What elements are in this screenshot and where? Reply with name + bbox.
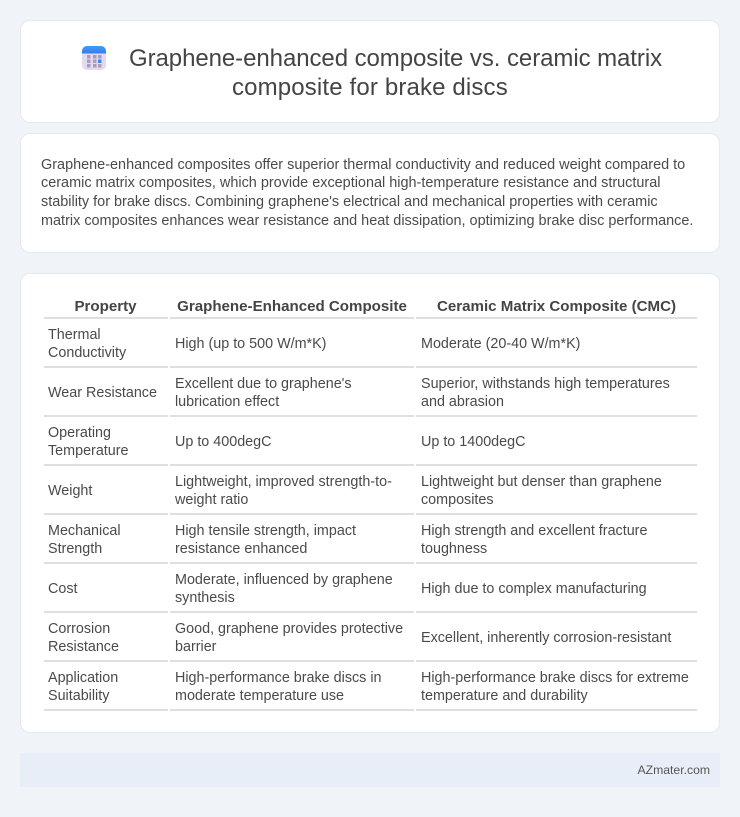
- title: composite for brake discs: [232, 74, 508, 101]
- footer bar: [20, 753, 720, 787]
- row: thermal conductivity: Moderate (20-40 W/m*K): [421, 336, 580, 352]
- title: Graphene-enhanced composite vs. ceramic matrix: [129, 45, 662, 72]
- row: application suitability: Suitability: [48, 688, 109, 704]
- row: corrosion resistance: Resistance: [48, 639, 119, 655]
- panel: summary card: [20, 133, 720, 253]
- row: weight: Lightweight but denser than graphene: [421, 474, 662, 490]
- row: thermal conductivity: [44, 327, 697, 368]
- row: thermal conductivity: Thermal: [48, 327, 101, 343]
- row: mechanical strength: toughness: [421, 541, 487, 557]
- row: application suitability: moderate temperature use: [175, 688, 344, 704]
- table header: Ceramic Matrix Composite (CMC): [437, 298, 676, 315]
- summary text: ceramic matrix composites, which provide exceptional high-temperature resistance and structural: [41, 175, 660, 191]
- row: thermal conductivity: High (up to 500 W/m*K): [175, 336, 326, 352]
- row: cost: synthesis: [175, 590, 235, 606]
- row: mechanical strength: High strength and excellent fracture: [421, 523, 647, 539]
- row: wear resistance: lubrication effect: [175, 394, 279, 410]
- row: operating temperature: Temperature: [48, 443, 129, 459]
- row: operating temperature: Up to 1400degC: [421, 434, 525, 450]
- row: application suitability: High-performance brake discs for extreme: [421, 670, 689, 686]
- table header: Property: [74, 298, 137, 315]
- row: application suitability: temperature and durability: [421, 688, 588, 704]
- row: wear resistance: [44, 376, 697, 417]
- summary text: Graphene-enhanced composites offer superior thermal conductivity and reduced weight compared to: [41, 157, 685, 173]
- row: weight: composites: [421, 492, 494, 508]
- row: wear resistance: Wear Resistance: [48, 385, 157, 401]
- summary text: stability for brake discs. Combining graphene's electrical and mechanical properties with ceramic: [41, 194, 658, 210]
- summary text: [41, 157, 693, 229]
- row: cost: [44, 572, 697, 613]
- row: application suitability: Application: [48, 670, 118, 686]
- row: mechanical strength: [44, 523, 697, 564]
- row: wear resistance: and abrasion: [421, 394, 504, 410]
- row: mechanical strength: Strength: [48, 541, 102, 557]
- row: weight: Lightweight, improved strength-to-: [175, 474, 392, 490]
- panel: comparison table card: [20, 273, 720, 733]
- row: application suitability: High-performance brake discs in: [175, 670, 381, 686]
- row: cost: High due to complex manufacturing: [421, 581, 647, 597]
- summary text: matrix composites enhances wear resistance and heat dissipation, optimizing brake disc performance.: [41, 213, 693, 229]
- table header: [44, 298, 697, 319]
- row: wear resistance: Excellent due to graphene's: [175, 376, 352, 392]
- row: thermal conductivity: Conductivity: [48, 345, 126, 361]
- row: operating temperature: Operating: [48, 425, 111, 441]
- row: corrosion resistance: Good, graphene provides protective: [175, 621, 403, 637]
- row: wear resistance: Superior, withstands high temperatures: [421, 376, 670, 392]
- row: mechanical strength: High tensile strength, impact: [175, 523, 356, 539]
- row: cost: Moderate, influenced by graphene: [175, 572, 393, 588]
- row: corrosion resistance: Corrosion: [48, 621, 110, 637]
- panel: title card: [20, 20, 720, 123]
- row: operating temperature: [44, 425, 697, 466]
- table header: Graphene-Enhanced Composite: [177, 298, 407, 315]
- row: corrosion resistance: barrier: [175, 639, 216, 655]
- row: weight: [44, 474, 697, 515]
- row: weight: weight ratio: [175, 492, 248, 508]
- row: application suitability: [44, 670, 697, 711]
- title: [129, 45, 662, 101]
- row: operating temperature: Up to 400degC: [175, 434, 272, 450]
- row: corrosion resistance: [44, 621, 697, 662]
- row: weight: Weight: [48, 483, 92, 499]
- row: mechanical strength: resistance enhanced: [175, 541, 307, 557]
- icon: calendar: [82, 46, 106, 70]
- row: corrosion resistance: Excellent, inherently corrosion-resistant: [421, 630, 671, 646]
- footer brand: AZmater.com: [638, 763, 710, 777]
- row: cost: Cost: [48, 581, 78, 597]
- comparison table: [44, 298, 697, 711]
- row: mechanical strength: Mechanical: [48, 523, 121, 539]
